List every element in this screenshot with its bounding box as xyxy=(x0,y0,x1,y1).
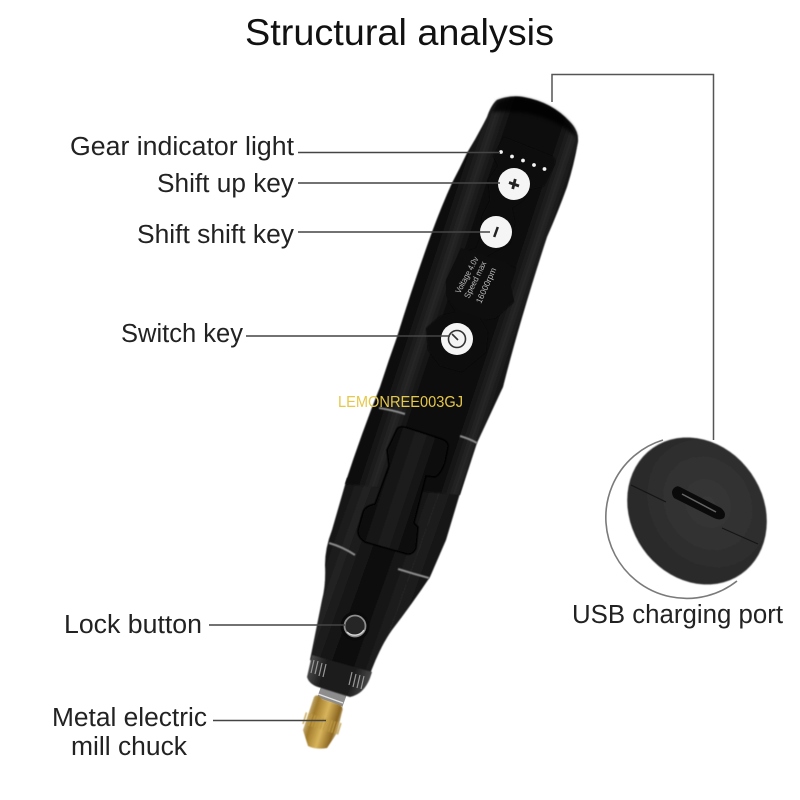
connector line: USB charging port callout xyxy=(552,74,714,440)
shift up key xyxy=(498,168,530,200)
spec text xyxy=(453,254,498,305)
spec text: Speed max xyxy=(462,259,489,300)
label: shift up key: Shift up key xyxy=(157,170,294,198)
switch key xyxy=(441,323,473,355)
label: metal electric mill chuck xyxy=(52,704,207,761)
grip recess xyxy=(358,427,448,554)
spec text: 16000rpm xyxy=(474,266,498,305)
top cap shading xyxy=(492,97,577,138)
label: metal electric mill chuck: mill chuck xyxy=(71,733,187,761)
main handle xyxy=(345,96,578,495)
gear indicator lights xyxy=(499,150,546,171)
label: USB charging port: USB charging port xyxy=(572,601,783,629)
tool chuck threads xyxy=(315,686,347,713)
lock button xyxy=(340,612,370,640)
knurled collar xyxy=(307,655,372,697)
inset circle outline xyxy=(606,440,737,598)
lower body taper xyxy=(310,460,470,680)
label: gear indicator light: Gear indicator light xyxy=(70,133,294,161)
label: switch key: Switch key xyxy=(121,320,243,348)
metal electric mill chuck xyxy=(303,695,343,749)
spec text: Voltage 4.0v xyxy=(453,254,481,295)
label: shift shift key: Shift shift key xyxy=(137,221,294,249)
label: metal electric mill chuck: Metal electric xyxy=(52,704,207,732)
USB-C port xyxy=(672,486,725,520)
inset tool end xyxy=(599,410,795,612)
title: Structural analysis xyxy=(245,12,554,53)
control panel backplate xyxy=(426,137,555,372)
band highlights xyxy=(329,408,477,578)
label lines xyxy=(209,152,500,720)
shift down key xyxy=(480,216,512,248)
USB port detail inset xyxy=(599,410,795,612)
label: lock button: Lock button xyxy=(64,611,202,639)
spec plate xyxy=(446,248,516,320)
watermark: LEMONREE003GJ xyxy=(338,394,463,411)
inset seam xyxy=(631,485,758,544)
illustration: rotary tool pen xyxy=(303,96,578,749)
